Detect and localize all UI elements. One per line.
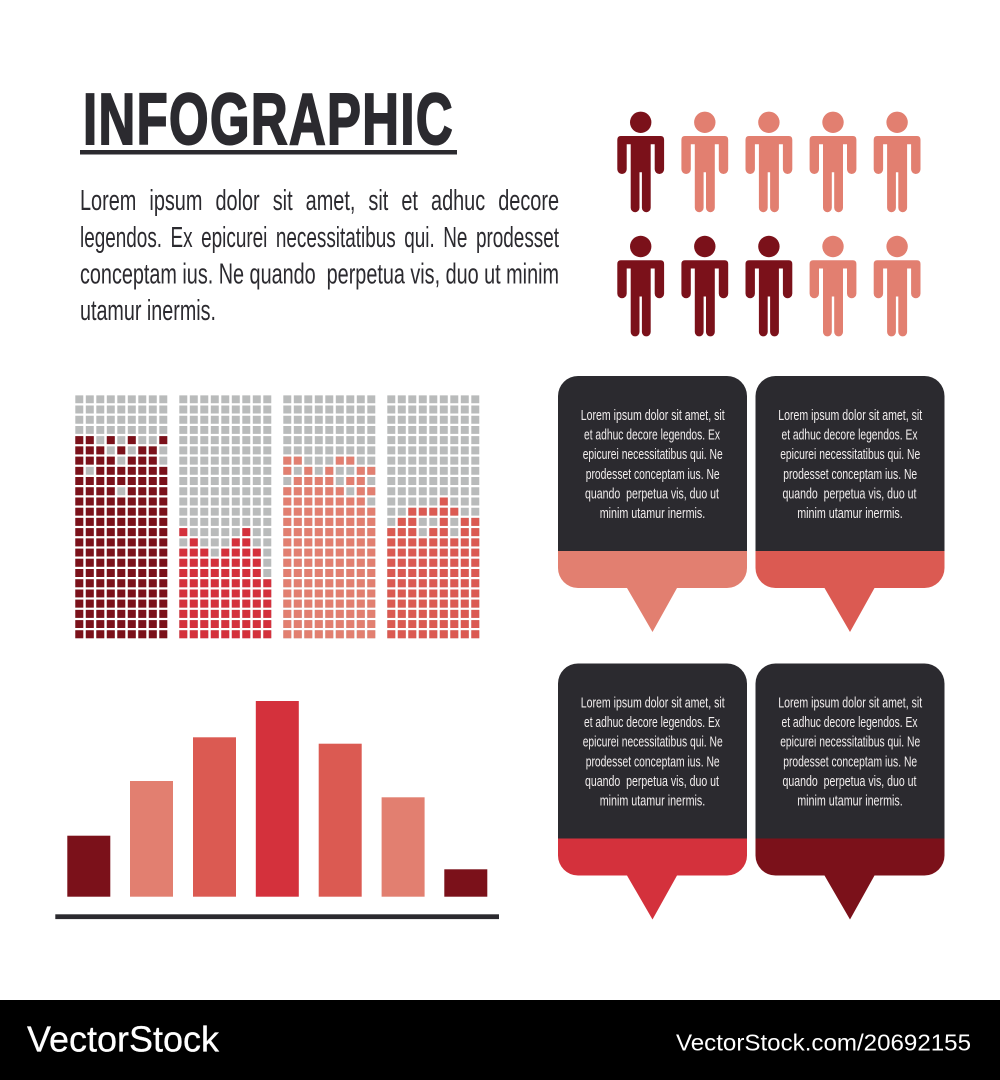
pictogram: people row 1, one of five highlighted: [617, 112, 920, 212]
callout: top right, coral: et adhuc decore legendos. Ex: [782, 428, 918, 444]
bar chart: [55, 701, 499, 919]
callout: bottom right, dark red: [756, 664, 944, 920]
dot grid chart 4: coral: [387, 399, 479, 634]
callout: bottom left, red: minim utamur inermis.: [600, 794, 705, 810]
callout: top left, salmon: et adhuc decore legendos. Ex: [584, 428, 721, 444]
callout: top right, coral: quando perpetua vis, duo ut: [782, 486, 916, 502]
callout: top left, salmon: [558, 376, 747, 632]
callout: top right, coral: [756, 376, 944, 632]
callout: bottom right, dark red: et adhuc decore legendos. Ex: [782, 715, 918, 731]
dot grid chart 3: salmon: [283, 399, 375, 634]
intro text block: conceptam ius. Ne quando perpetua vis, duo ut minim: [80, 258, 559, 290]
title: INFOGRAPHIC: [83, 80, 454, 160]
intro text block: Lorem ipsum dolor sit amet, sit et adhuc decore: [80, 185, 559, 217]
dot grid chart 2: red: [179, 399, 271, 634]
callout: bottom left, red: et adhuc decore legendos. Ex: [584, 715, 721, 731]
callout: top left, salmon: quando perpetua vis, duo ut: [585, 486, 719, 502]
intro text block: [80, 185, 559, 327]
callout: bottom left, red: [558, 664, 747, 920]
callout: top left, salmon: Lorem ipsum dolor sit amet, sit: [581, 408, 725, 424]
callout: bottom right, dark red: prodesset conceptam ius. Ne: [783, 754, 917, 770]
callout: top left, salmon: minim utamur inermis.: [600, 506, 705, 522]
callout: bottom right, dark red: minim utamur inermis.: [797, 794, 903, 810]
callout: top right, coral: minim utamur inermis.: [797, 506, 903, 522]
callout: bottom right, dark red: epicurei necessitatibus qui. Ne: [780, 735, 920, 751]
pictogram: people row 2, three of five highlighted: [617, 236, 920, 336]
footer watermark bar: VectorStock.com/20692155: [676, 1030, 971, 1056]
intro text block: utamur inermis.: [80, 295, 216, 327]
callout: top left, salmon: prodesset conceptam ius. Ne: [586, 467, 720, 483]
callout: bottom left, red: quando perpetua vis, duo ut: [585, 774, 719, 790]
callout: top left, salmon: epicurei necessitatibus qui. Ne: [583, 447, 723, 463]
callout: bottom left, red: epicurei necessitatibus qui. Ne: [583, 735, 723, 751]
footer watermark bar: VectorStock: [27, 1018, 220, 1060]
callout: bottom left, red: prodesset conceptam ius. Ne: [586, 754, 720, 770]
callout: bottom right, dark red: Lorem ipsum dolor sit amet, sit: [778, 696, 922, 712]
callout: top right, coral: epicurei necessitatibus qui. Ne: [780, 447, 920, 463]
callout: top right, coral: prodesset conceptam ius. Ne: [783, 467, 917, 483]
callout: top right, coral: Lorem ipsum dolor sit amet, sit: [778, 408, 922, 424]
intro text block: legendos. Ex epicurei necessitatibus qui. Ne prodesset: [80, 222, 559, 254]
callout: bottom left, red: Lorem ipsum dolor sit amet, sit: [581, 696, 725, 712]
callout: bottom right, dark red: quando perpetua vis, duo ut: [782, 774, 916, 790]
dot grid chart 1: dark red: [75, 399, 167, 634]
footer watermark bar: [0, 1000, 1000, 1080]
